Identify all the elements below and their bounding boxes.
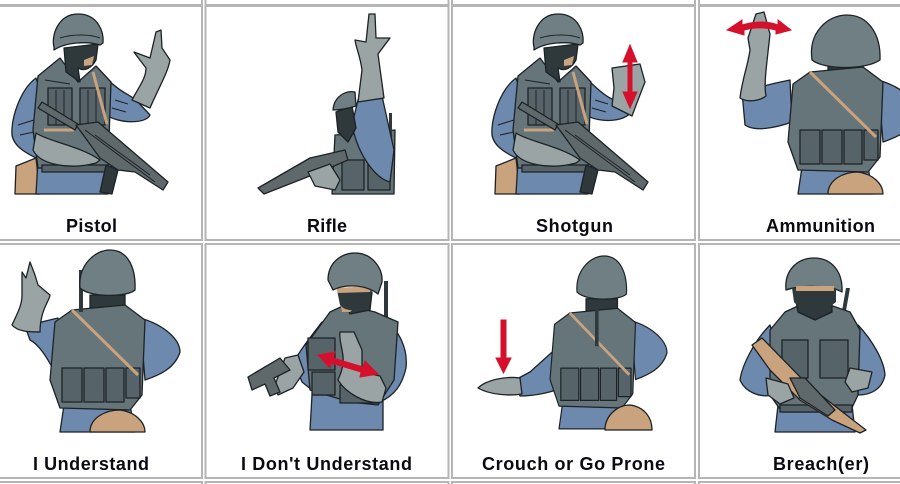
label: Crouch or Go Prone: Crouch or Go Prone [482, 454, 665, 474]
figure: operator signalling shotgun [492, 14, 648, 194]
label: I Don't Understand: I Don't Understand [241, 454, 412, 474]
label: Pistol: Pistol [66, 216, 117, 236]
panel: I Don't Understand [241, 253, 412, 474]
label: I Understand: I Understand [33, 454, 149, 474]
panel: Pistol [12, 14, 170, 236]
figure: operator signalling ammunition [740, 12, 900, 194]
arrow: left and right [727, 20, 791, 35]
figure: operator signalling rifle [258, 14, 395, 194]
figure: operator signalling crouch or go prone [478, 256, 667, 430]
panel: Crouch or Go Prone [478, 256, 667, 474]
arrow: down [496, 320, 511, 373]
figure: operator signalling I understand [12, 250, 180, 432]
panel: Ammunition [727, 12, 900, 236]
label: Rifle: Rifle [307, 216, 347, 236]
panel: Shotgun [492, 14, 648, 236]
figure: operator signalling breach(er) [740, 258, 885, 433]
panel: I Understand [12, 250, 180, 474]
label: Breach(er): Breach(er) [773, 454, 869, 474]
label: Ammunition: Ammunition [766, 216, 875, 236]
figure: operator signalling I don't understand [248, 253, 406, 430]
figure: operator signalling pistol [12, 14, 170, 194]
arrow: up and down [623, 45, 637, 108]
panel: Breach(er) [740, 258, 885, 474]
panel: Rifle [258, 14, 395, 236]
label: Shotgun: Shotgun [536, 216, 613, 236]
arrow: left and right [318, 352, 378, 377]
